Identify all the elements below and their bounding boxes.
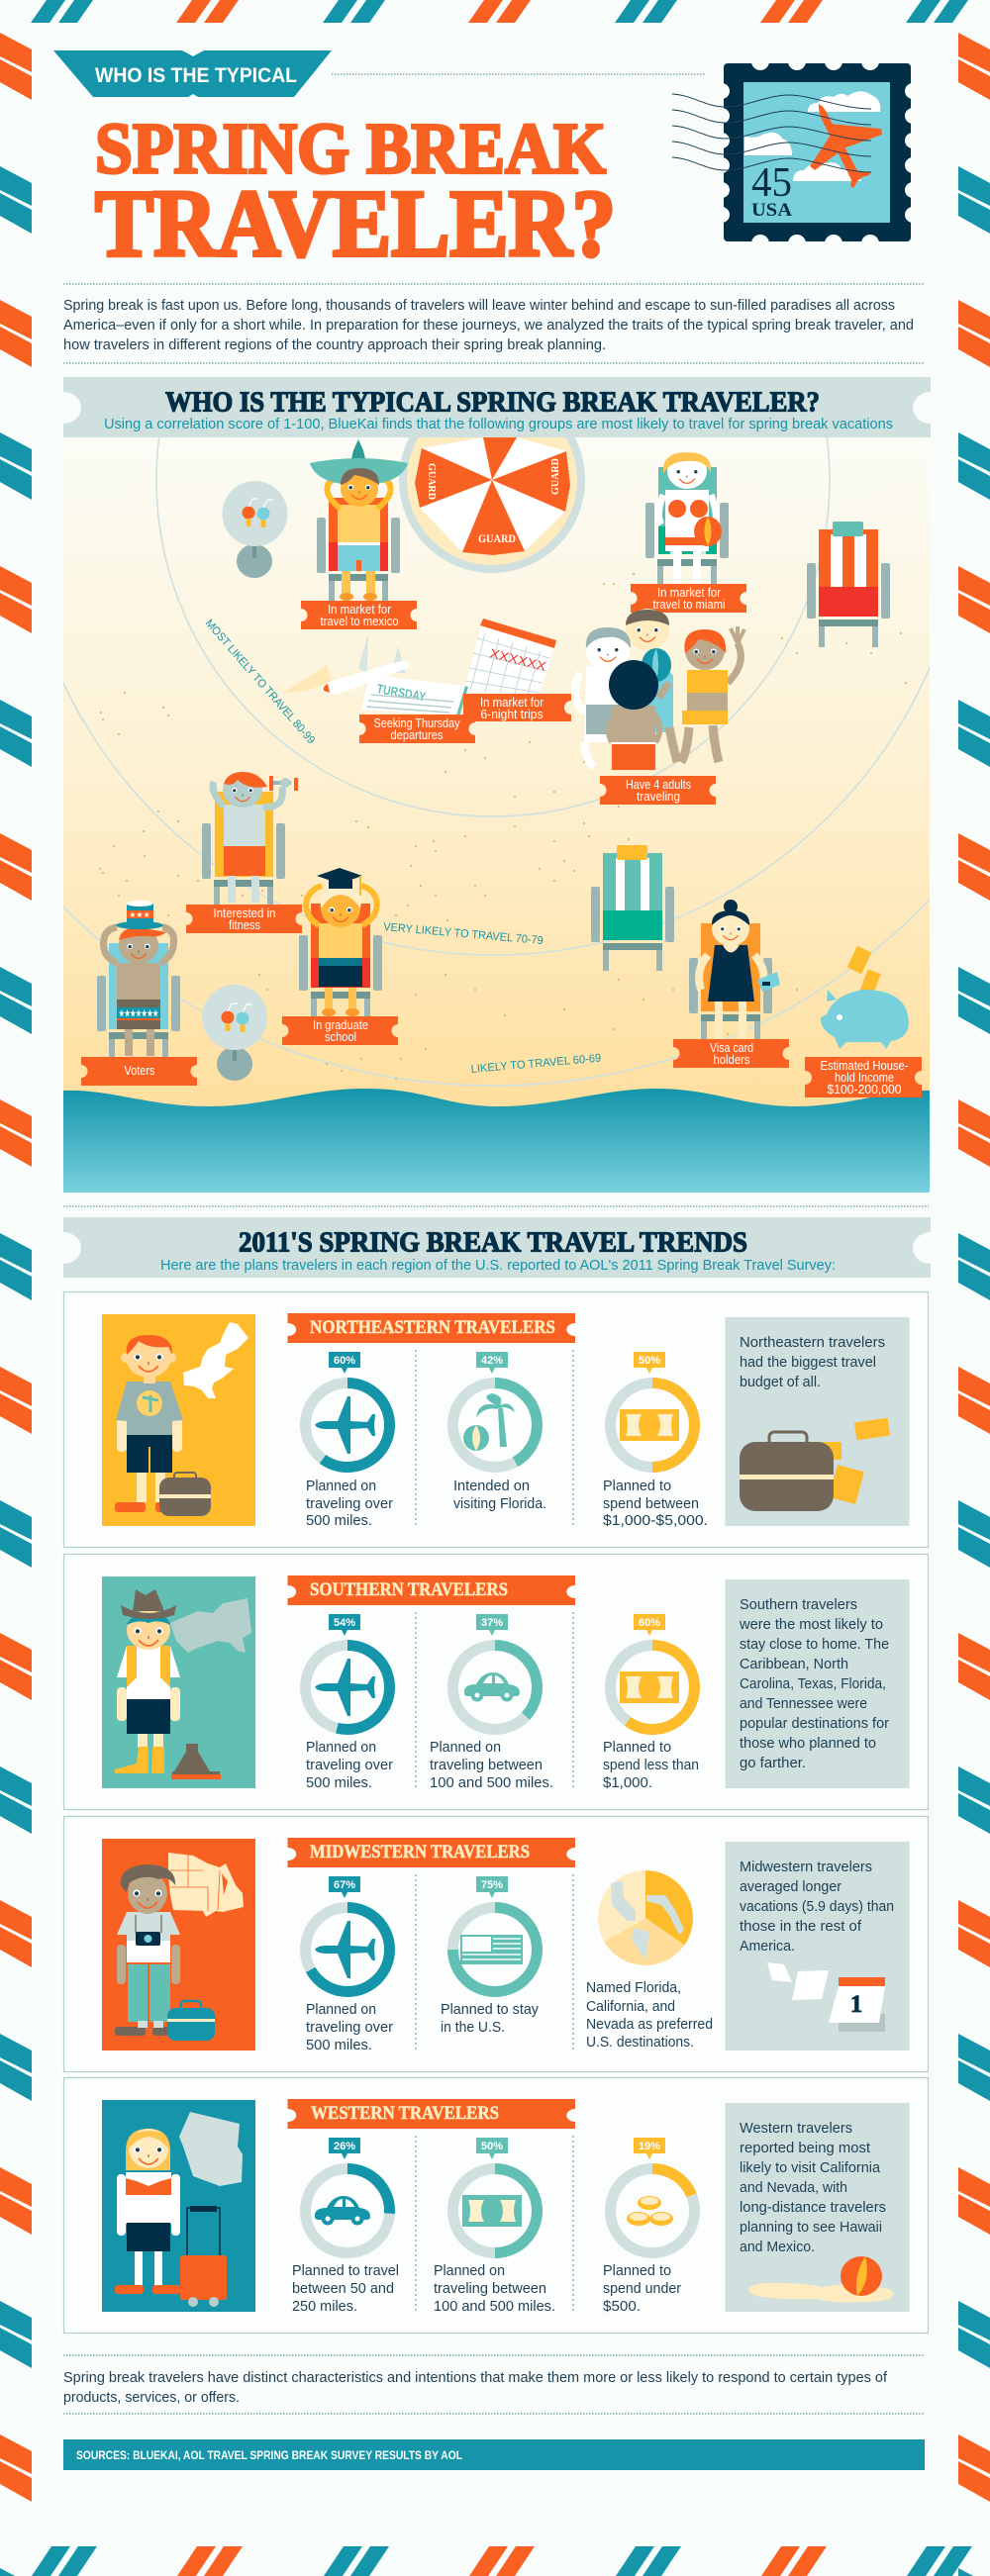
label: miami: In market for [657,585,722,600]
callout: south: popular destinations for [740,1716,889,1732]
stat: 60 percent over 500 miles: 60% [334,1355,355,1367]
callout: south: and Tennessee were [740,1696,867,1712]
stat: 19 percent budget: 19% [639,2141,660,2152]
panel: midwestern travelers [63,1817,929,2072]
label: graduate: school [325,1029,356,1044]
people: four adults [575,609,744,770]
label: income [805,1057,922,1097]
person: graduate [299,868,382,1019]
icon: second side table [202,985,267,1081]
stat: 19 percent budget: Planned to [603,2263,671,2279]
callout: northeast: budget of all. [740,1375,821,1390]
icon: beach umbrella: GUARD [426,463,438,500]
banner: typical traveler [63,377,931,437]
section ribbon [287,1575,575,1605]
kicker ribbon: WHO IS THE TYPICAL [95,64,297,87]
callout: midwest: America. [740,1939,795,1955]
callout: south: those who planned to [740,1736,876,1752]
ocean [63,1089,930,1193]
stat: 50 percent budget: spend between [603,1496,699,1512]
stat: 60 percent budget: Planned to [603,1740,671,1756]
stat: 37 percent 100-500 miles: Planned on [430,1740,501,1756]
label: 4 adults: traveling [637,789,680,804]
callout: west: long-distance travelers [740,2200,886,2216]
stat: 60 percent over 500 miles [305,1352,393,1529]
icon: side table top [222,481,287,578]
intro text: America–even if only for a short while. In preparation for these journeys, we analyzed the traits of the typical spring break traveler, and [63,318,914,334]
callout: northeast: Northeastern travelers [740,1335,885,1351]
stat: 42 percent florida: Intended on [453,1479,530,1494]
stat: 50 percent budget: Planned to [603,1479,671,1494]
stat: 75 percent stay in US: Planned to stay [441,2002,540,2018]
icon: empty orange chair [807,522,890,647]
ring label: most likely: MOST LIKELY TO TRAVEL 80-99 [203,618,317,746]
stat: 37 percent 100-500 miles: 37% [481,1617,503,1629]
callout: south: were the most likely to [739,1617,883,1633]
stat: 67 percent over 500 miles: 500 miles. [306,2038,372,2053]
label: fitness: fitness [229,917,260,932]
icon: calendar [463,619,556,695]
callout: midwest: those in the rest of [740,1919,862,1935]
chart: preferred destinations pie: Named Florida, [586,1980,681,1996]
stat: 26 percent 50-250 miles: 26% [334,2141,355,2152]
label: fitness [186,905,302,933]
stat: 42 percent florida: 42% [481,1355,503,1367]
stat: 19 percent budget [603,2138,695,2315]
stat: 54 percent over 500 miles [305,1614,393,1791]
label: visa card: holders [713,1052,750,1067]
person: visa card holder [689,900,780,1042]
icon: beach umbrella: GUARD [478,531,516,545]
stat: 42 percent florida [453,1352,546,1512]
stat: 50 percent budget: $1,000-$5,000. [603,1513,708,1529]
label: income: hold Income [835,1070,894,1085]
label: voters [81,1057,197,1086]
label: 6-night trips: In market for [480,695,544,710]
stat: 54 percent over 500 miles: 54% [334,1617,355,1629]
stat: 60 percent budget [603,1614,699,1791]
callout: south: Caribbean, North [740,1657,848,1672]
section ribbon: SOUTHERN TRAVELERS [310,1580,508,1600]
kicker ribbon [53,50,332,97]
banner: travel trends [63,1217,931,1278]
character card: south [102,1576,255,1788]
icon: empty green chair [591,845,674,971]
label: income: Estimated House- [820,1058,909,1073]
character card: west [102,2100,255,2312]
label: thursday departures [359,715,475,743]
stat: 67 percent over 500 miles: Planned on [306,2002,376,2018]
stat: 60 percent over 500 miles: traveling over [306,1496,393,1512]
stat: 37 percent 100-500 miles [430,1614,553,1791]
person: miami traveler [645,452,729,587]
callout: west [725,2103,909,2312]
stat: 67 percent over 500 miles: 67% [334,1879,355,1891]
chart: preferred destinations pie: California, and [586,1999,675,2015]
stat: 50 percent budget: 50% [639,1355,660,1367]
stat: 54 percent over 500 miles: Planned on [306,1740,376,1756]
person: voter: ★★★★★★★ [119,1008,159,1018]
label: mexico: travel to mexico [321,614,398,628]
main title [95,109,616,276]
banner: typical traveler: WHO IS THE TYPICAL SPRING BREAK TRAVELER? [165,388,820,418]
label: fitness: Interested in [214,906,275,920]
callout: west: and Mexico. [740,2240,815,2255]
callout: south: stay close to home. The [740,1637,889,1653]
callout: midwest: Midwestern travelers [740,1860,872,1875]
label: 4 adults [600,776,716,805]
stat: 19 percent budget: spend under [603,2281,681,2297]
stat: 60 percent budget: $1,000. [603,1775,652,1791]
stat: 26 percent 50-250 miles: between 50 and [292,2281,394,2297]
ring label: likely: LIKELY TO TRAVEL 60-69 [470,1053,602,1076]
panel: southern travelers [63,1554,929,1809]
label: 6-night trips: 6-night trips [481,707,544,721]
sources bar [63,2439,925,2470]
label: miami: travel to miami [653,597,726,612]
character card: midwest [102,1839,255,2051]
stat: 26 percent 50-250 miles: 250 miles. [292,2299,357,2315]
stat: 60 percent over 500 miles: 500 miles. [306,1513,372,1529]
callout: northeast [725,1317,909,1526]
label: thursday departures: Seeking Thursday [374,716,460,730]
callout: midwest: vacations (5.9 days) than [740,1899,894,1915]
label: visa card: Visa card [710,1040,753,1055]
closing text [63,2370,888,2406]
callout: south: Southern travelers [740,1597,857,1613]
label: visa card [673,1039,789,1068]
stat: 60 percent budget: 60% [639,1617,660,1629]
label: graduate: In graduate [313,1017,368,1032]
label: income: $100-200,000 [828,1082,901,1097]
stat: 50 percent 100-500 miles [434,2138,555,2315]
person: fitness [202,772,298,907]
callout: west: reported being most [740,2141,870,2156]
label: 6-night trips [463,694,571,721]
stat: 54 percent over 500 miles: 500 miles. [306,1775,372,1791]
icon: calendar: XXXXXX [488,645,548,674]
panel: northeastern travelers [63,1292,929,1548]
section ribbon: NORTHEASTERN TRAVELERS [310,1318,555,1338]
sources bar: SOURCES: BLUEKAI, AOL TRAVEL SPRING BREAK SURVEY RESULTS BY AOL [76,2448,462,2462]
stat: 26 percent 50-250 miles [292,2138,399,2315]
banner: travel trends: Here are the plans travelers in each region of the U.S. reported to AOL's 2011 Spring Break Travel Survey: [160,1257,836,1274]
icon: beach umbrella: GUARD [549,458,561,495]
icon: beach umbrella [399,387,585,573]
closing text: Spring break travelers have distinct characteristics and intentions that make them more or less likely to respond to certain types of [63,2370,888,2386]
panel: western travelers [63,2078,929,2334]
section ribbon [287,2099,575,2129]
callout: west: likely to visit California [740,2160,881,2176]
icon: plane ticket: TURSDAY [375,681,428,705]
section ribbon [287,1838,575,1867]
character card: northeast [102,1314,255,1526]
label: 4 adults: Have 4 adults [626,777,691,792]
callout: midwest: 1 [850,1991,862,2018]
closing text: products, services, or offers. [63,2390,240,2406]
stat: 67 percent over 500 miles: traveling over [306,2020,393,2036]
stat: 42 percent florida: visiting Florida. [453,1496,546,1512]
stat: 60 percent over 500 miles: Planned on [306,1479,376,1494]
stat: 19 percent budget: $500. [603,2299,641,2315]
stat: 67 percent over 500 miles [305,1876,393,2053]
person: voter: ★★★ [129,910,150,919]
intro text: how travelers in different regions of the country approach their spring break planning. [63,337,606,353]
chart: preferred destinations pie: U.S. destinations. [586,2035,694,2051]
stat: 26 percent 50-250 miles: Planned to travel [292,2263,399,2279]
section ribbon: MIDWESTERN TRAVELERS [310,1843,530,1862]
banner: travel trends: 2011'S SPRING BREAK TRAVEL TRENDS [239,1227,747,1259]
icon: postage stamp: USA [751,200,792,221]
stat: 75 percent stay in US [441,1876,540,2036]
callout: south [725,1579,909,1788]
callout: northeast: had the biggest travel [740,1355,876,1371]
label: miami [631,584,746,613]
intro text: Spring break is fast upon us. Before long, thousands of travelers will leave winter behind and escape to sun-filled paradises all across [63,298,895,314]
intro text [63,298,914,353]
label: thursday departures: departures [390,727,444,742]
main title: TRAVELER? [95,170,616,276]
chart: preferred destinations pie [586,1870,713,2051]
section ribbon [287,1313,575,1343]
label: voters: Voters [125,1063,155,1078]
stat: 75 percent stay in US: 75% [481,1879,503,1891]
icon: airplane [283,633,410,695]
banner: typical traveler: Using a correlation score of 1-100, BlueKai finds that the following groups are most likely to travel for spring break vacations [104,416,893,432]
stat: 50 percent 100-500 miles: 100 and 500 miles. [434,2299,555,2315]
icon: postage stamp: 45 [751,160,792,206]
stat: 50 percent 100-500 miles: 50% [481,2141,503,2152]
callout: south: Carolina, Texas, Florida, [740,1676,886,1692]
icon: postage stamp [672,52,921,252]
chart: preferred destinations pie: Nevada as preferred [586,2017,713,2033]
callout: midwest [725,1842,909,2051]
stat: 50 percent 100-500 miles: Planned on [434,2263,505,2279]
section ribbon: WESTERN TRAVELERS [311,2104,499,2124]
callout: west: Western travelers [740,2121,852,2137]
main title: SPRING BREAK [95,109,606,188]
stat: 37 percent 100-500 miles: 100 and 500 miles. [430,1775,553,1791]
label: mexico [301,601,417,629]
label: graduate [282,1016,398,1045]
callout: west: planning to see Hawaii [740,2220,882,2236]
person: mexico traveler [310,439,408,602]
icon: piggy bank [821,946,909,1049]
stat: 37 percent 100-500 miles: traveling between [430,1758,543,1773]
ring label: very likely: VERY LIKELY TO TRAVEL 70-79 [383,921,544,947]
callout: midwest: averaged longer [740,1879,842,1895]
panel: beach scene [63,437,930,1193]
person: voter [97,901,180,1060]
stat: 75 percent stay in US: in the U.S. [441,2020,505,2036]
icon: plane ticket [361,675,468,716]
stat: 60 percent budget: spend less than [603,1758,699,1773]
stat: 50 percent 100-500 miles: traveling between [434,2281,546,2297]
callout: west: and Nevada, with [740,2180,847,2196]
stat: 50 percent budget [603,1352,708,1529]
callout: south: go farther. [740,1756,806,1771]
label: mexico: In market for [328,602,392,617]
stat: 54 percent over 500 miles: traveling over [306,1758,393,1773]
